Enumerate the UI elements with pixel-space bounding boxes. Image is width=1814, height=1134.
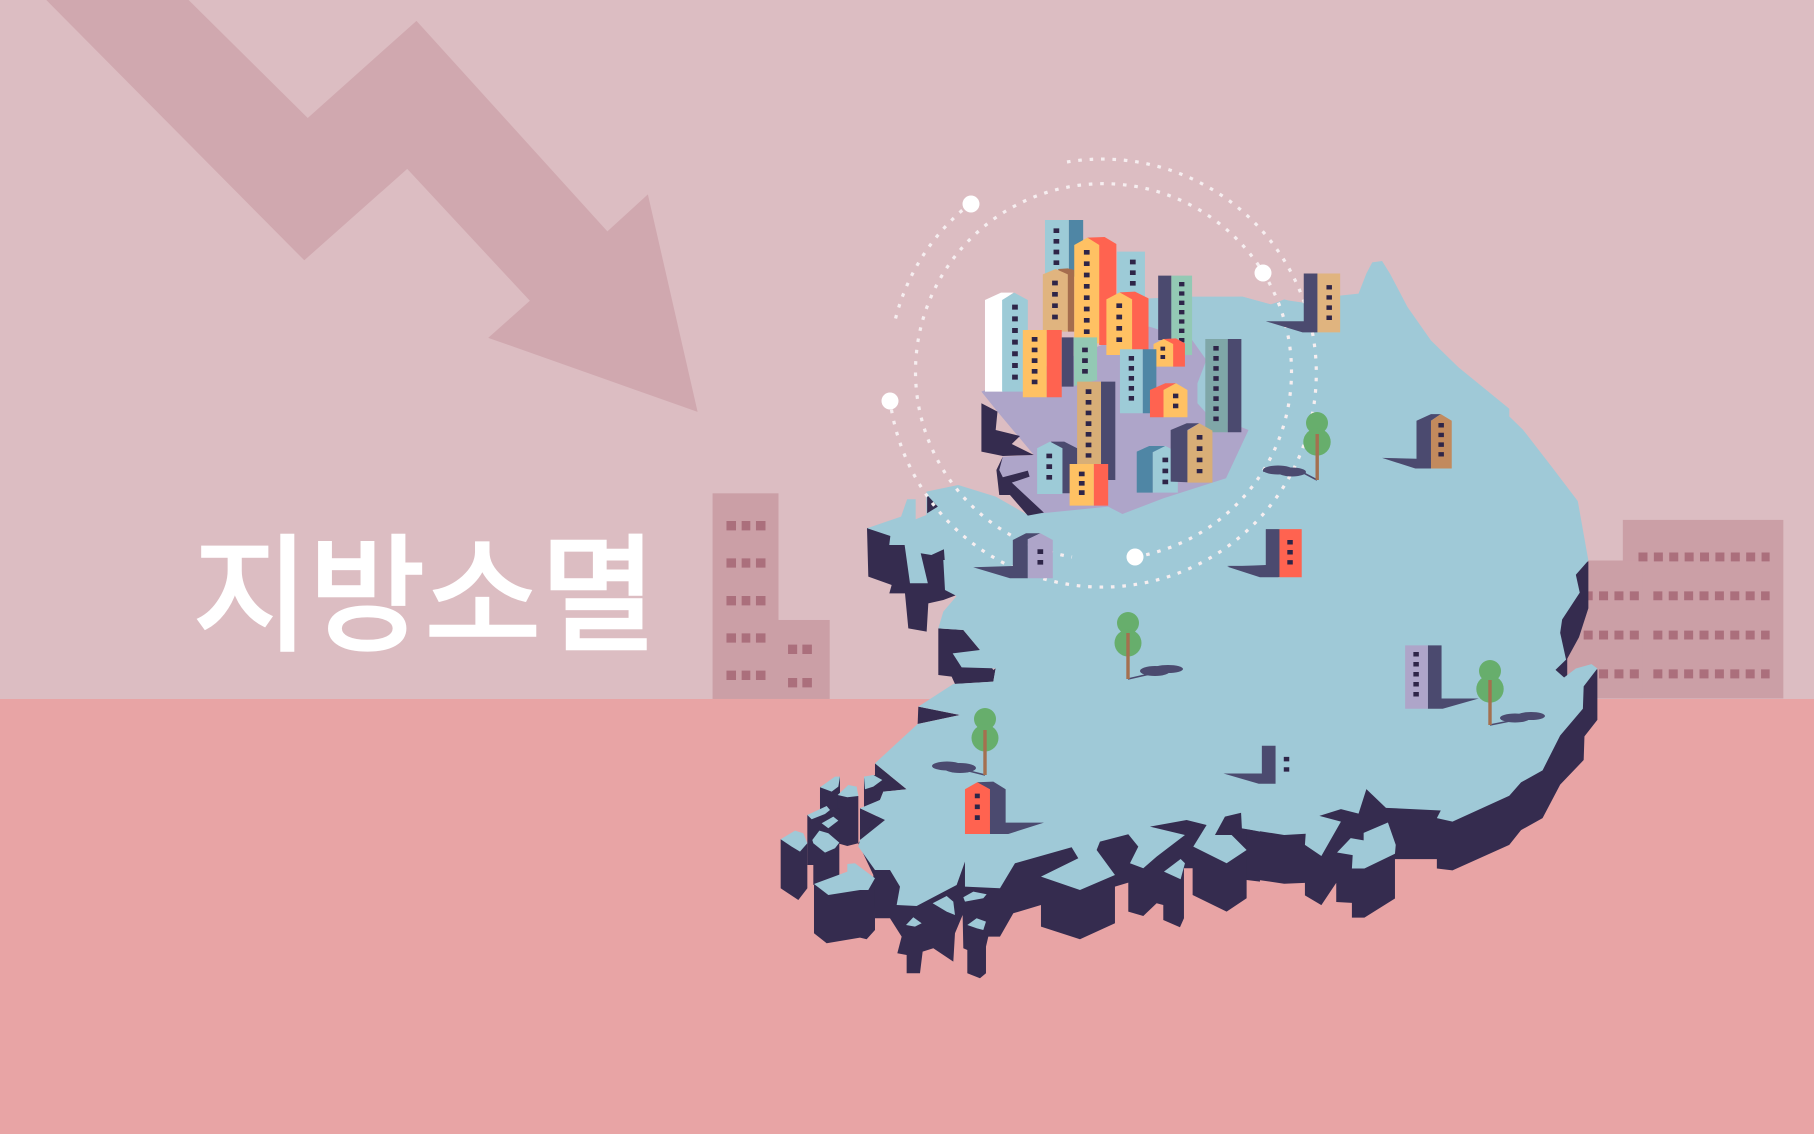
building: land-coloured slab south xyxy=(1223,746,1287,784)
title: 지방소멸 xyxy=(193,526,657,667)
building: navy and green slab xyxy=(1062,337,1097,387)
map: dark coast, east and south xyxy=(1247,561,1597,918)
building: tan and navy tower xyxy=(1077,382,1115,480)
building: tan slab north-east xyxy=(1266,273,1340,332)
building: lower right tan house xyxy=(1171,423,1212,483)
building: blue slab xyxy=(1120,349,1156,413)
map of South Korea xyxy=(781,261,1597,978)
building: blue tower top xyxy=(1045,220,1083,277)
building: tiny orange block xyxy=(1154,338,1185,367)
orbit nodes xyxy=(882,196,1272,566)
tree: north-east xyxy=(1263,412,1331,480)
building: small blue tower xyxy=(1117,252,1145,300)
background: sky xyxy=(0,0,1814,699)
map: capital region and west-coast inlets xyxy=(927,327,1249,516)
tree: centre xyxy=(1114,612,1183,679)
building: tall orange tower xyxy=(1074,237,1116,345)
building: red house south-west xyxy=(965,782,1044,834)
building: brown house east xyxy=(1382,414,1452,469)
building: lower right blue house xyxy=(1137,446,1178,493)
building: purple slab south-east xyxy=(1405,645,1479,709)
tree: south-east xyxy=(1476,660,1545,725)
declining arrow xyxy=(46,0,698,412)
building: white and blue tower xyxy=(985,293,1028,392)
building: red and orange block xyxy=(1150,383,1187,417)
map: dark coast, west xyxy=(781,527,1260,978)
background: ground xyxy=(0,699,1814,1134)
building: lower blue house xyxy=(1037,442,1077,494)
right background buildings xyxy=(1564,520,1783,698)
map: land, south-west xyxy=(781,560,1260,930)
building: green and navy tower xyxy=(1158,276,1192,355)
building: orange slab xyxy=(1023,330,1062,397)
dotted orbit lines xyxy=(890,159,1316,587)
left background buildings xyxy=(713,493,830,699)
building: purple house on map xyxy=(973,533,1053,578)
building: lower orange slab xyxy=(1070,464,1108,506)
building: mid orange block xyxy=(1106,292,1149,355)
building: red slab centre xyxy=(1227,529,1301,577)
building: tan tower xyxy=(1043,268,1074,332)
building: red slab on map xyxy=(1227,529,1302,577)
tree: south-west xyxy=(932,708,998,775)
capital region building cluster xyxy=(973,220,1302,578)
map: land, north xyxy=(867,297,1320,600)
building: grey-green tower xyxy=(1205,339,1241,432)
scattered buildings, east xyxy=(1223,273,1479,784)
map: land, east xyxy=(1200,261,1597,869)
